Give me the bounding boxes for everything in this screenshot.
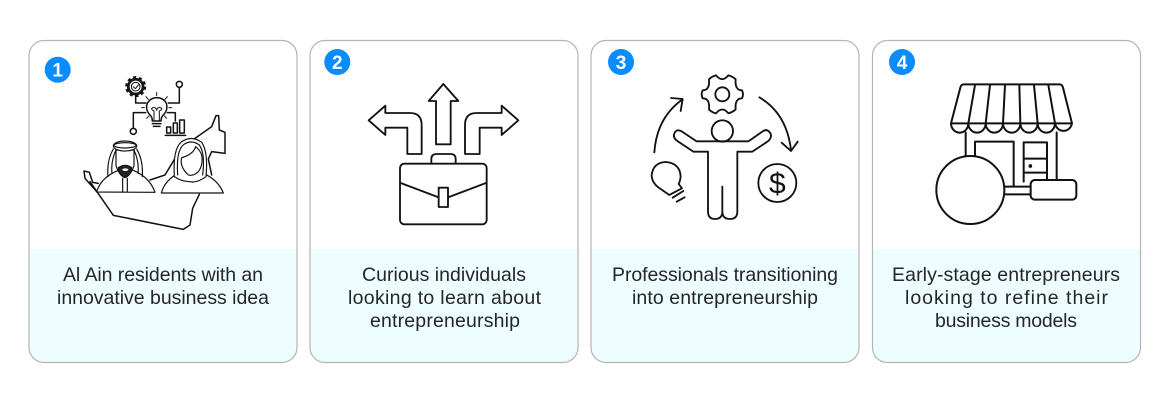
light bulb	[652, 162, 685, 202]
text: card 3 caption	[612, 264, 838, 309]
text: card 2 caption: looking to learn about	[348, 287, 542, 309]
text: card 4 caption	[892, 264, 1120, 332]
number badge 1: 1	[52, 60, 63, 82]
text: card 2 caption	[348, 264, 542, 332]
number badge 4	[889, 49, 915, 75]
text: card 4 caption: business models	[935, 310, 1077, 332]
icon: storefront with magnifying glass	[936, 84, 1076, 224]
panel: card 3 professionals	[591, 40, 859, 363]
number badge 2: 2	[332, 53, 343, 74]
text: card 3 caption: Professionals transitioning	[612, 264, 838, 286]
text: card 4 caption: Early-stage entrepreneurs	[892, 264, 1120, 286]
woman	[161, 138, 223, 193]
number badge 3: 3	[616, 53, 626, 74]
text: card 2 caption: entrepreneurship	[370, 310, 520, 332]
arrow: bulb to gear	[654, 98, 683, 152]
arrow: left	[369, 106, 422, 154]
panel: card 2 curious individuals	[310, 40, 578, 363]
dollar coin	[758, 164, 796, 202]
icon: residents, UAE map and idea	[84, 78, 225, 229]
number badge 2	[324, 49, 350, 75]
text: card 1 caption: Al Ain residents with an	[63, 264, 263, 286]
text: card 2 caption: Curious individuals	[362, 264, 526, 286]
text: card 1 caption: innovative business idea	[57, 287, 269, 309]
person	[674, 120, 771, 219]
idea gear	[127, 78, 145, 96]
arrow: right	[465, 106, 518, 154]
number badge 4: 4	[897, 53, 908, 74]
light bulb with circuit lines	[130, 81, 186, 135]
arrow: up	[429, 84, 458, 144]
man	[97, 141, 155, 192]
shop building	[966, 132, 1057, 186]
gear	[702, 75, 743, 113]
number badge 3	[608, 49, 634, 75]
text: card 4 caption: looking to refine their	[905, 287, 1108, 309]
number badge 1	[45, 57, 71, 83]
panel: card 1 residents	[29, 40, 297, 363]
text: card 1 caption	[57, 264, 269, 309]
dollar coin: $	[769, 168, 786, 201]
map outline	[84, 116, 225, 229]
awning	[951, 84, 1072, 133]
panel: card 4 early-stage entrepreneurs	[872, 40, 1140, 363]
magnifying glass	[936, 156, 1076, 224]
icon: briefcase and three arrows	[369, 84, 518, 224]
text: card 3 caption: into entrepreneurship	[632, 287, 818, 309]
icon: person with gear, bulb and dollar cycle	[652, 75, 798, 219]
arrow: gear to dollar	[759, 97, 798, 151]
briefcase	[400, 154, 487, 224]
